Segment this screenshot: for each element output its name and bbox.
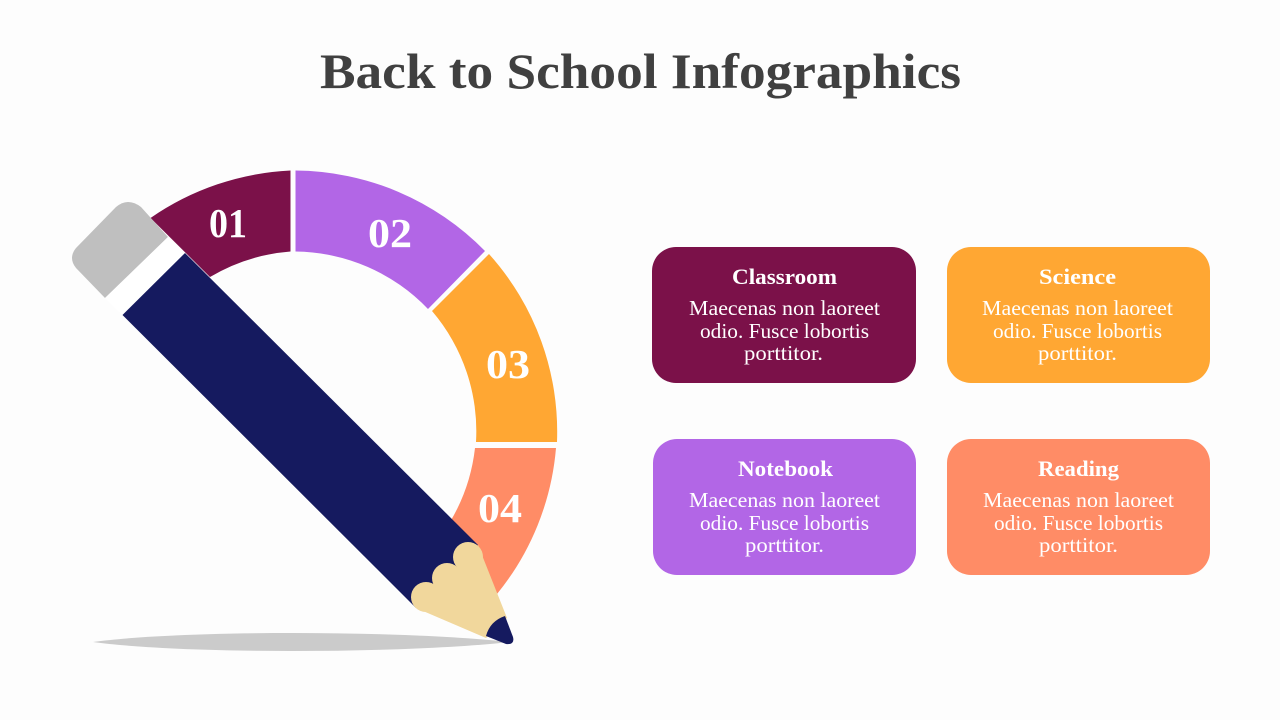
ring segment 02 [296,170,485,309]
card: Science: odio. Fusce lobortis [993,319,1162,343]
card: Classroom: porttitor. [744,341,823,365]
pencil lead [486,616,513,644]
ring segment 04 [450,448,556,594]
ring segment 03: 03 [486,341,530,387]
card: Science: Maecenas non laoreet [982,296,1173,320]
card: Classroom [652,247,916,383]
card: Science [947,247,1210,383]
ring segment 03 [432,254,557,442]
card: Classroom: odio. Fusce lobortis [700,319,869,343]
card: Classroom: Maecenas non laoreet [689,296,880,320]
ring segment 01 [150,170,290,277]
card: Reading: odio. Fusce lobortis [994,511,1163,535]
card: Reading: porttitor. [1039,533,1118,557]
card: Notebook: odio. Fusce lobortis [700,511,869,535]
card: Science: Science [1039,264,1116,289]
ring segment 04: 04 [478,485,522,531]
card: Notebook: porttitor. [745,533,824,557]
pencil [72,202,513,644]
pencil body [122,253,478,608]
card: Notebook: Notebook [738,456,834,481]
ferrule band [105,237,185,315]
card: Notebook: Maecenas non laoreet [689,488,880,512]
title: Back to School Infographics [320,43,961,99]
ring segment 01: 01 [209,200,247,246]
card: Reading [947,439,1210,575]
ring segment 02: 02 [368,210,412,256]
card: Classroom: Classroom [732,264,837,289]
card: Notebook [653,439,916,575]
eraser [72,202,168,298]
pencil shadow [93,633,510,651]
pencil wood tip [411,542,507,638]
card: Reading: Reading [1038,456,1119,481]
card: Science: porttitor. [1038,341,1117,365]
card: Reading: Maecenas non laoreet [983,488,1174,512]
